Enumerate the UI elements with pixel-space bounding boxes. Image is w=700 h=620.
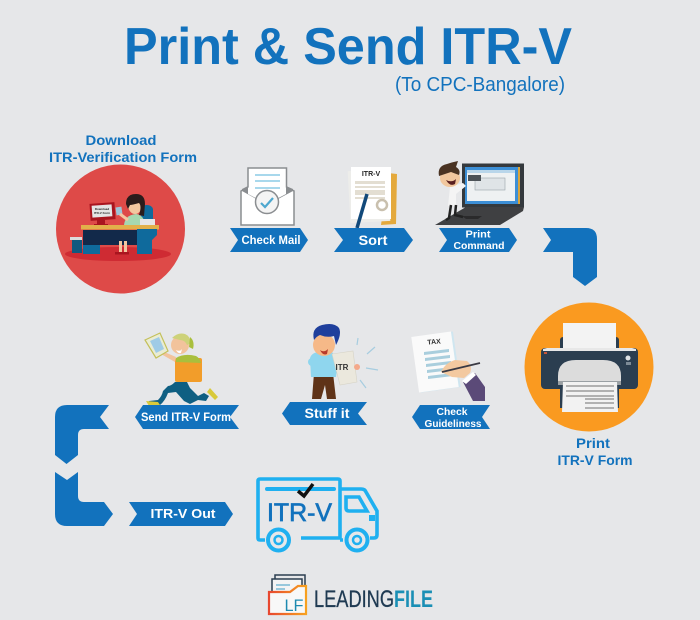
step: sort [334,167,413,252]
wordmark accent: FILE [394,586,433,613]
icon: man holding ITR paper: ITR [336,363,349,372]
ribbon: check guideliness: Guideliness [424,419,482,430]
heading: ITR-verification form: ITR-Verification Form [49,149,197,165]
ribbon: ITR-V out: ITR-V Out [150,506,216,521]
ribbon: sort: Sort [358,233,388,248]
icon: running courier [145,333,218,406]
step: print command [435,161,524,252]
icon: delivery truck [258,479,377,550]
arrow: top bend [55,405,109,464]
icon: folder logo [269,575,306,615]
ribbon: print command: Print [466,230,491,240]
ribbon: print command: Command [454,241,504,252]
wordmark: LEADING [314,586,394,613]
step: print form [524,302,654,468]
heading: print: Print [576,435,610,451]
subtitle: (To CPC-Bangalore) [395,74,565,96]
icon: documents: ITR-V [362,171,380,178]
ribbon: check guideliness: Check [436,407,468,418]
step: check mail [230,168,308,252]
logo: Leading File [269,575,433,615]
icon: woman at desk in red circle: Download [95,207,109,211]
icon: man at laptop [435,161,524,225]
heading: download: Download [86,132,156,148]
title: Print & Send ITR-V [124,18,572,76]
arrow: bottom bend [55,472,113,526]
step: stuff it [282,324,378,425]
arrow: turn down [543,228,597,286]
ribbon: stuff it: Stuff it [304,406,350,421]
step: download form [49,132,197,294]
icon: folder logo: LF [284,596,304,615]
icon: tax form and hand: TAX [427,338,441,347]
step: send ITR-V form [135,333,239,429]
icon: woman at desk in red circle: ITR-V Form [94,211,110,215]
ribbon: ITR-V out [129,502,233,526]
step: ITR-V out [129,479,377,550]
step: check guideliness [411,331,490,430]
ribbon: send ITR-V form: Send ITR-V Form [141,412,231,424]
icon: delivery truck: ITR-V [267,499,332,527]
ribbon: print command [439,228,517,252]
ribbon: check guideliness [412,405,490,430]
icon: envelope [241,168,294,225]
icon: printer in orange circle [524,302,654,432]
heading: ITR-V form: ITR-V Form [558,452,632,468]
icon: woman at desk in red circle [56,164,185,294]
ribbon: check mail: Check Mail [242,235,300,247]
